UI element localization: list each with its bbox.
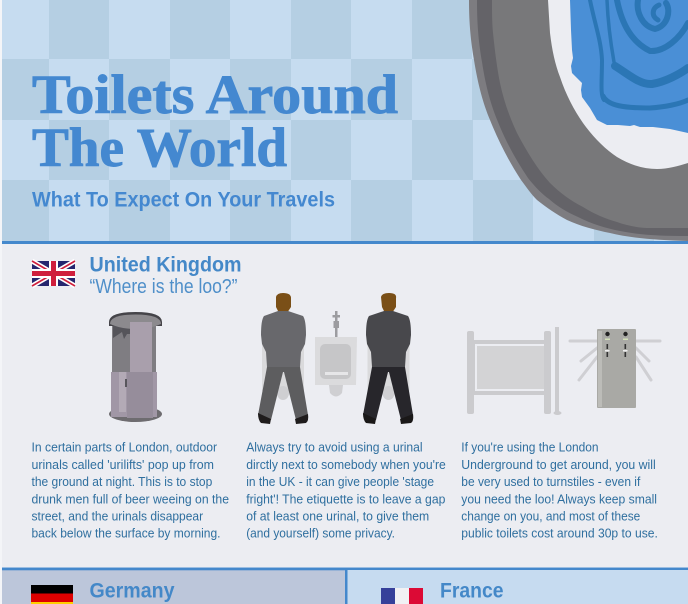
urinal behind right man xyxy=(368,345,410,400)
text block: turnstiles: be very used to turnstiles - even if xyxy=(461,475,641,489)
text block: urinal etiquette: in the UK - it can give people 'stage xyxy=(246,475,434,489)
turnstile xyxy=(570,329,660,408)
heading: United Kingdom: United Kingdom xyxy=(90,254,242,276)
panel: header xyxy=(2,0,688,244)
title: The World xyxy=(32,117,287,178)
text block: urilifts: street, and the urinals disappear xyxy=(32,510,203,524)
text block: turnstiles: public toilets cost around 30p to use. xyxy=(461,527,658,541)
water in bowl xyxy=(570,0,688,133)
icon: UK flag xyxy=(32,261,75,286)
subheading: where is the loo: “Where is the loo?” xyxy=(90,276,238,298)
illustration: urilift xyxy=(109,312,162,422)
text block: urilifts: In certain parts of London, outdoor xyxy=(32,441,217,455)
urinal behind left man xyxy=(262,345,304,400)
panel: United Kingdom xyxy=(2,244,688,567)
illustration: gate and turnstile xyxy=(467,327,660,415)
text block: urilifts: drunk men full of beer weeing on the xyxy=(32,492,229,506)
text block: urinal etiquette: dirctly next to somebody when you're xyxy=(246,458,446,472)
text block: turnstiles: If you're using the London xyxy=(461,441,599,455)
text block: urinal etiquette: fright'! The etiquette is to leave a gap xyxy=(246,492,445,506)
text block: urilifts: urinals called 'urilifts' pop up from xyxy=(32,458,214,472)
toilet bowl interior xyxy=(548,0,688,169)
heading: France: France xyxy=(440,580,504,603)
text block: urinal etiquette: of at least one urinal, to give them xyxy=(246,510,429,524)
text block: urinal etiquette: Always try to avoid using a urinal xyxy=(246,441,423,455)
gate xyxy=(467,327,562,415)
subtitle: What To Expect On Your Travels xyxy=(32,188,335,212)
panel: Germany xyxy=(2,568,688,604)
central urinal xyxy=(315,311,357,396)
icon: French flag xyxy=(381,588,423,604)
heading: Germany: Germany xyxy=(90,580,175,603)
text block: urinal etiquette: (and yourself) some privacy. xyxy=(246,527,395,541)
water swirl lines xyxy=(590,0,688,108)
title: Toilets Around xyxy=(32,64,398,125)
text block: urilifts: the ground at night. This is to stop xyxy=(32,475,212,489)
illustration: toilet bowl seen from above xyxy=(469,0,688,241)
left man xyxy=(258,293,308,424)
right man xyxy=(363,293,413,424)
icon: German flag xyxy=(31,585,73,604)
illustration: men at urinals xyxy=(258,293,413,424)
text block: turnstiles: change on you, and most of these xyxy=(461,510,640,524)
text block: turnstiles: Underground to get around, you will xyxy=(461,458,656,472)
text block: urilifts: back below the surface by morning. xyxy=(32,527,220,541)
panel: France xyxy=(345,570,688,604)
text block: turnstiles: you need the loo! Always keep small xyxy=(461,492,657,506)
title xyxy=(32,64,398,178)
